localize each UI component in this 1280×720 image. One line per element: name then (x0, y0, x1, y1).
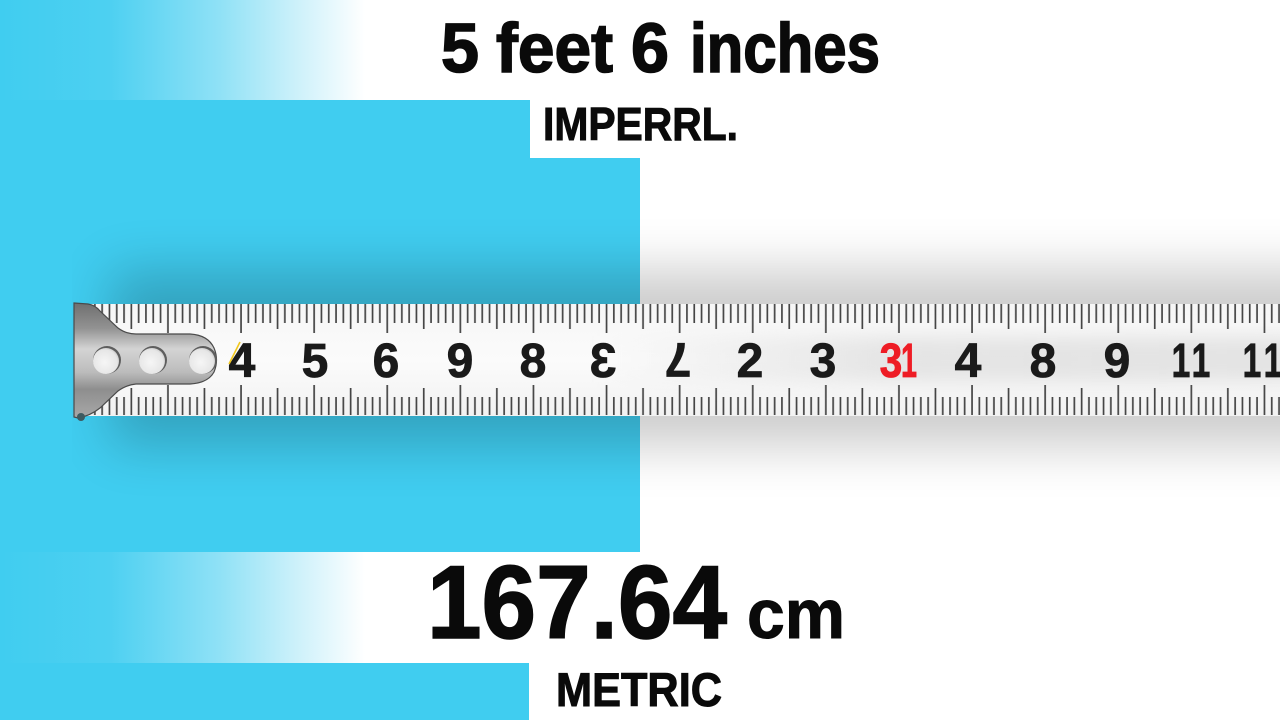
cyan block: upper step (0, 100, 530, 158)
tape numbers: 8 (1030, 335, 1056, 388)
number: 167.64 (427, 545, 727, 661)
heading: imperial value (441, 9, 880, 87)
tape numbers: 8 (520, 335, 546, 388)
tape numbers: 3 (880, 335, 902, 388)
tape numbers: 3 (590, 335, 616, 388)
tape numbers: 3 (810, 335, 836, 388)
heading: imperial value: feet (496, 9, 613, 87)
tape numbers: 5 (302, 335, 328, 388)
label: imperial: IMPERRL. (543, 98, 738, 150)
tape numbers: 1 (1192, 333, 1210, 387)
hook hole 3 (189, 346, 217, 374)
heading: metric value (427, 545, 845, 661)
tape body (78, 304, 1280, 416)
tape grey sheen (600, 336, 1280, 382)
tape numbers: 1 (1243, 333, 1261, 387)
unit: cm (747, 575, 845, 653)
hook rivet (77, 413, 85, 421)
metal end hook (74, 303, 217, 421)
tape drop shadow (110, 270, 1280, 446)
tape numbers: 7 (665, 332, 691, 385)
cyan gradient band: bottom (0, 552, 365, 663)
heading: imperial value: inches (690, 9, 880, 87)
tape numbers: 2 (737, 335, 763, 388)
label: metric: METRIC (556, 663, 722, 716)
tape numbers: 6 (373, 335, 399, 388)
yellow fleck on digit 4 (229, 342, 240, 364)
cyan block: main panel (0, 158, 640, 552)
heading: imperial value: 5 (441, 9, 479, 87)
cyan gradient band: top (0, 0, 365, 100)
heading: imperial value: 6 (631, 9, 669, 87)
hook hole 2 (139, 346, 167, 374)
tape numbers: 4 (955, 335, 982, 388)
tape numbers: 4 (229, 335, 256, 388)
tape numbers: 1 (1172, 333, 1190, 387)
cyan block: lower step (0, 663, 529, 720)
top tick marks (78, 304, 1280, 334)
tape numbers: 1 (901, 335, 917, 388)
tape measure (74, 303, 1280, 421)
bottom tick marks (78, 385, 1280, 416)
hook hole 1 (93, 346, 121, 374)
tape numbers (229, 332, 1280, 388)
tape numbers: 9 (447, 335, 473, 388)
tape numbers: 9 (1104, 335, 1130, 388)
